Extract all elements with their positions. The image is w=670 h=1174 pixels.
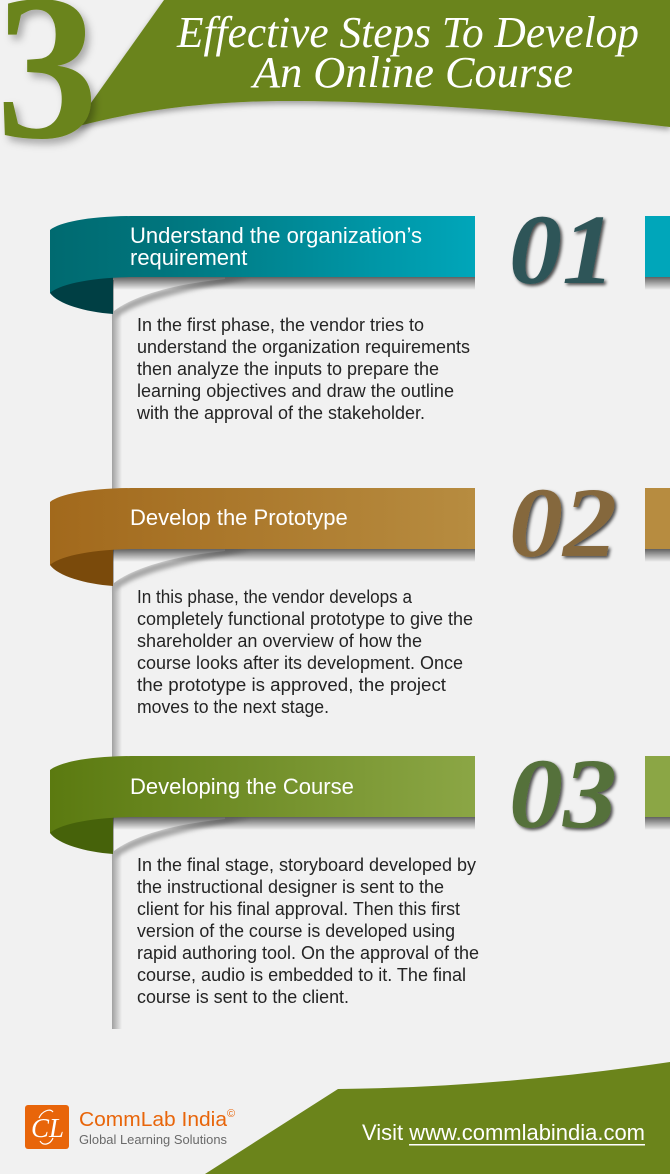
logo tagline: Global Learning Solutions bbox=[79, 1132, 227, 1147]
body text 2: moves to the next stage. bbox=[137, 697, 329, 717]
panel: step 2 bbox=[50, 467, 670, 717]
logo icon bbox=[25, 1105, 69, 1149]
title: Effective Steps To Develop bbox=[176, 8, 639, 57]
heading 3: Developing the Course bbox=[130, 774, 354, 799]
body text 3: rapid authoring tool. On the approval of the bbox=[137, 943, 479, 963]
page curl shadow 1 bbox=[114, 270, 250, 319]
ribbon shadow 2 bbox=[113, 549, 475, 562]
ribbon fold 2 bbox=[50, 540, 113, 586]
ribbon band 1 bbox=[50, 216, 475, 293]
title bbox=[176, 8, 639, 97]
logo bbox=[25, 1105, 235, 1149]
heading 2: Develop the Prototype bbox=[130, 505, 348, 530]
logo name: CommLab India bbox=[79, 1109, 228, 1131]
page curl shadow 3 bbox=[114, 810, 250, 859]
body text 2: completely functional prototype to give the bbox=[137, 609, 473, 629]
body text 1: In the first phase, the vendor tries to bbox=[137, 315, 424, 335]
body text 3: course, audio is embedded to it. The final bbox=[137, 965, 466, 985]
right ribbon stub 3 bbox=[645, 756, 670, 830]
ribbon shadow 1 bbox=[113, 277, 475, 290]
number 02: 02 bbox=[509, 467, 617, 578]
panel: step 1 bbox=[50, 194, 670, 423]
title: An Online Course bbox=[250, 48, 573, 97]
body text 3: client for his final approval. Then this first bbox=[137, 899, 460, 919]
body text 2: the prototype is approved, the project bbox=[137, 675, 446, 695]
body text 1: then analyze the inputs to prepare the bbox=[137, 359, 439, 379]
heading 1: Understand the organization’s bbox=[130, 223, 422, 248]
body text 3: version of the course is developed using bbox=[137, 921, 455, 941]
ribbon band 2 bbox=[50, 488, 475, 565]
body text 3: the instructional designer is sent to the bbox=[137, 877, 444, 897]
heading 1 bbox=[130, 223, 422, 270]
logo icon: CL bbox=[31, 1113, 64, 1143]
body text 2: course looks after its development. Once bbox=[137, 653, 463, 673]
body text 1 bbox=[136, 315, 470, 423]
footer banner bbox=[205, 1062, 670, 1174]
body text 2 bbox=[137, 587, 473, 717]
body text 2: In this phase, the vendor develops a bbox=[137, 587, 413, 607]
body text 1: understand the organization requirements bbox=[137, 337, 470, 357]
vertical timeline line bbox=[112, 280, 122, 1029]
number 01: 01 bbox=[509, 194, 615, 305]
heading 1: requirement bbox=[130, 245, 247, 270]
body text 3 bbox=[137, 855, 479, 1007]
panel: step 3 bbox=[50, 738, 670, 1007]
body text 3: In the final stage, storyboard developed by bbox=[137, 855, 476, 875]
page curl shadow 2 bbox=[114, 542, 250, 591]
number 03: 03 bbox=[509, 738, 617, 849]
right ribbon stub 1 bbox=[645, 216, 670, 290]
header banner bbox=[75, 0, 670, 127]
ribbon fold 1 bbox=[50, 268, 113, 314]
ribbon fold 3 bbox=[50, 808, 113, 854]
body text 1: learning objectives and draw the outline bbox=[137, 381, 454, 401]
right ribbon stub 2 bbox=[645, 488, 670, 562]
copyright mark: © bbox=[227, 1108, 235, 1120]
body text 3: course is sent to the client. bbox=[137, 987, 349, 1007]
body text 2: shareholder an overview of how the bbox=[137, 631, 422, 651]
website link: Visit www.commlabindia.com bbox=[362, 1120, 645, 1145]
ribbon band 3 bbox=[50, 756, 475, 833]
ribbon shadow 3 bbox=[113, 817, 475, 830]
body text 1: with the approval of the stakeholder. bbox=[136, 403, 425, 423]
